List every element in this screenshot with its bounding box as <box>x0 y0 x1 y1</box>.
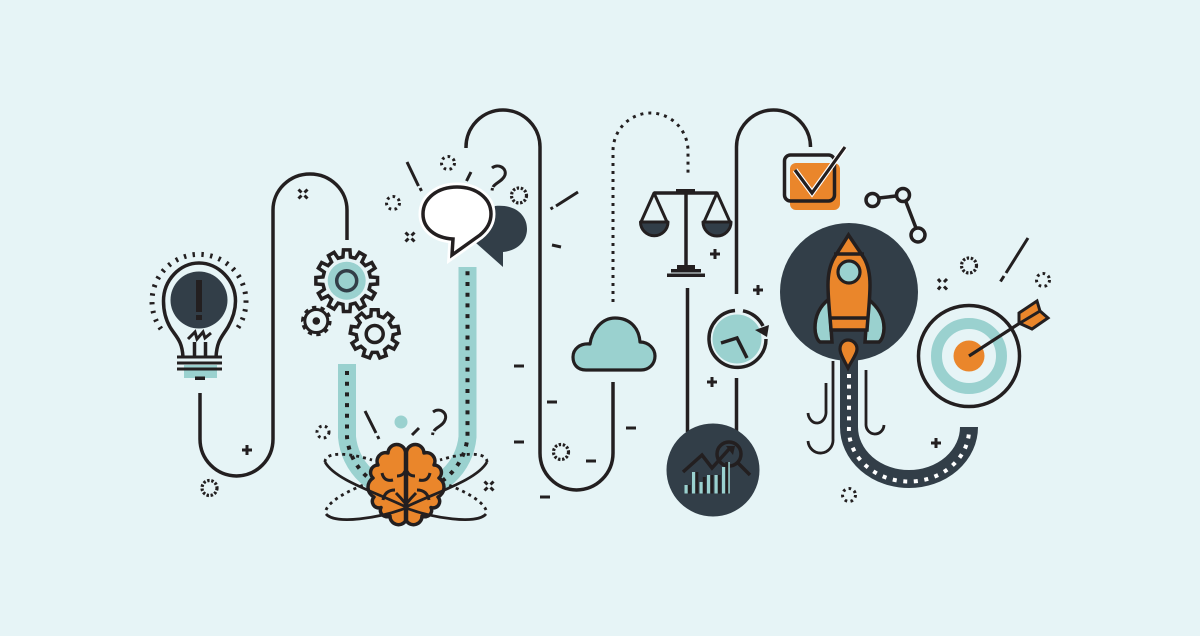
icon: cloud <box>573 318 655 370</box>
icon: hooks beside road <box>808 361 884 453</box>
icon: chart magnifier badge <box>666 424 760 516</box>
icon: checkbox <box>784 147 845 210</box>
icon: white speech bubble <box>423 187 491 255</box>
icon: cross marks <box>298 190 947 490</box>
icon: brain with orbits <box>325 444 487 525</box>
icon: dark speech bubble <box>476 206 527 267</box>
icon: plus marks <box>242 249 941 455</box>
icon: dashes right of the line <box>514 192 636 497</box>
chart bars <box>684 462 730 494</box>
icon: brain idea marks <box>365 410 446 439</box>
icon: small gear <box>303 308 330 334</box>
icon: hatched rings <box>202 188 976 496</box>
icon: road with dashes <box>849 350 969 482</box>
path: line from clock to chart <box>735 378 738 432</box>
icon: large gear <box>316 250 378 312</box>
path: line from bulb to gears <box>200 174 347 476</box>
icon: light bulb <box>152 254 246 380</box>
path: dotted line from cloud to scales <box>613 113 688 302</box>
icon: dart motion mark <box>1000 238 1028 282</box>
path: teal channel through brain <box>347 267 468 492</box>
icon: target with arrow <box>918 301 1048 406</box>
icon: medium gear <box>350 310 399 358</box>
path: line from clock to checkbox <box>736 110 810 294</box>
path: line from speech bubble to cloud <box>466 110 613 490</box>
icon: rocket badge <box>780 223 918 368</box>
icon: balance scales <box>640 189 731 277</box>
path: line from scales to chart <box>686 288 689 432</box>
icon: clock with arrow <box>709 310 769 367</box>
icon: connected nodes <box>866 188 925 242</box>
icon: dotted rings <box>317 156 1050 502</box>
icon: speech idea marks <box>407 162 505 191</box>
